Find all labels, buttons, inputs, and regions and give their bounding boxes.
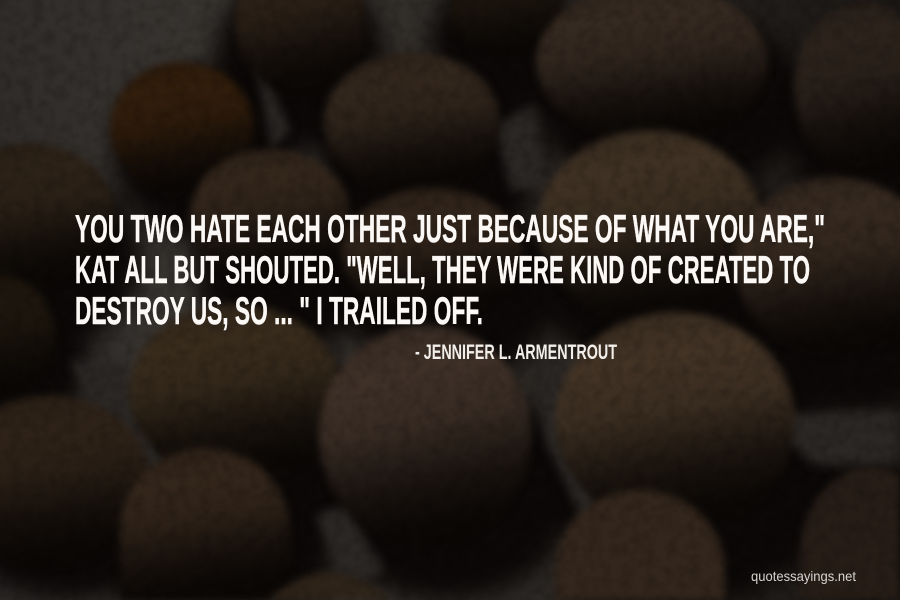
quote text <box>75 208 825 333</box>
watermark: quotessayings.net <box>751 568 856 584</box>
quote text: DESTROY US, SO ... " I TRAILED OFF. <box>75 290 483 333</box>
quote author: - JENNIFER L. ARMENTROUT <box>415 341 617 364</box>
